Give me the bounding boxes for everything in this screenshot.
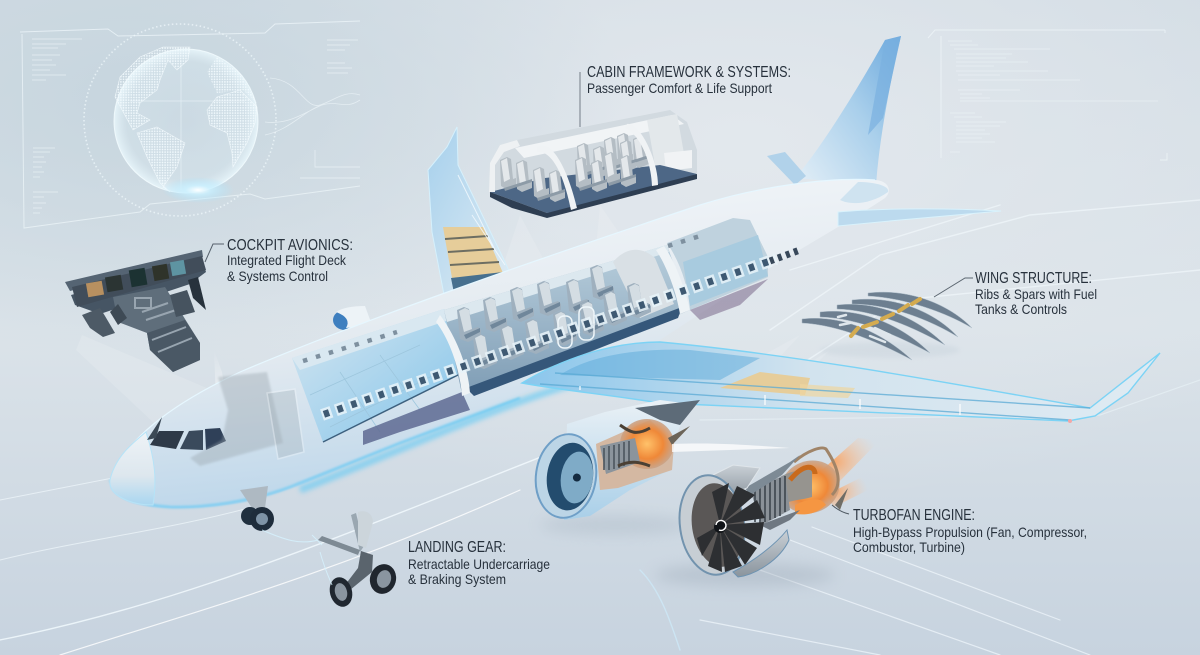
top cowl [703, 465, 760, 500]
bottom cowl [733, 530, 789, 577]
leader line [205, 244, 224, 262]
label: landing gear [408, 539, 550, 587]
aft hold cutaway [667, 218, 768, 320]
cockpit avionics module [65, 250, 206, 372]
data text lines [32, 39, 358, 213]
engine on wing [530, 400, 790, 535]
nose landing gear [240, 486, 274, 531]
landing gear module [262, 511, 399, 609]
label: turbofan engine [832, 505, 1087, 555]
label: cockpit avionics: COCKPIT AVIONICS: [227, 237, 353, 254]
rear turbine [773, 448, 848, 522]
forward cargo cutaway [292, 309, 470, 445]
label: wing structure [934, 270, 1097, 317]
transparent cockpit section [190, 372, 304, 466]
fan [673, 471, 765, 579]
leader line [832, 505, 849, 514]
data waves [265, 78, 360, 135]
label: landing gear: Retractable Undercarriage [408, 556, 550, 572]
cockpit screens [86, 260, 186, 297]
light streaks [0, 200, 1200, 655]
standalone turbofan engine [655, 438, 880, 587]
label: wing structure: WING STRUCTURE: [975, 270, 1092, 287]
vertical tail [767, 36, 901, 185]
leader line [934, 278, 973, 297]
hologram panel: code [928, 30, 1167, 160]
label: turbofan engine: Combustor, Turbine) [853, 539, 965, 555]
label: landing gear: LANDING GEAR: [408, 539, 506, 556]
label: wing structure: Tanks & Controls [975, 301, 1067, 317]
label: turbofan engine: High-Bypass Propulsion (Fan, Compressor, [853, 524, 1087, 540]
label: cabin framework [580, 64, 791, 127]
cabin door outlines [558, 307, 594, 348]
airplane [109, 36, 1160, 531]
projection beams [76, 205, 830, 438]
hologram panel: globe [20, 21, 360, 228]
far wing [428, 127, 515, 300]
cabin seats [457, 265, 651, 369]
leader line [579, 72, 581, 127]
flames [822, 438, 880, 507]
label: cabin framework: Passenger Comfort & Life Support [587, 80, 772, 96]
cabin framework module [489, 110, 697, 218]
label: cockpit avionics: & Systems Control [227, 268, 328, 284]
cabin seats [500, 133, 649, 202]
globe sphere [84, 24, 276, 216]
main cabin cutaway [436, 245, 690, 396]
label: wing structure: Ribs & Spars with Fuel [975, 286, 1097, 302]
compressor [745, 455, 800, 530]
near wing [522, 342, 1160, 423]
label: cockpit avionics [205, 237, 353, 284]
far side engine [333, 306, 372, 330]
wing structure ribs [802, 292, 972, 360]
fuselage [109, 179, 889, 508]
label: cockpit avionics: Integrated Flight Deck [227, 252, 347, 268]
fuselage windows [303, 236, 800, 415]
label: landing gear: & Braking System [408, 571, 506, 587]
cockpit windows [147, 417, 226, 450]
label: cabin framework: CABIN FRAMEWORK & SYSTEMS: [587, 64, 791, 81]
label: turbofan engine: TURBOFAN ENGINE: [853, 507, 975, 524]
horizontal stabilizer [838, 209, 1001, 226]
nose cone [110, 432, 155, 505]
intake [530, 430, 602, 522]
